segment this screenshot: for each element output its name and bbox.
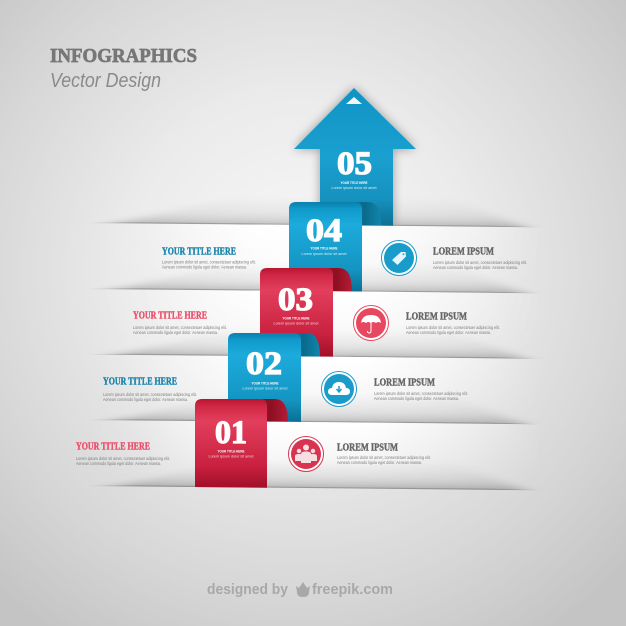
right text row 2: Aenean commodo ligula eget dolor. Aenean massa. [374, 396, 459, 401]
ribbon 02: Lorem ipsum dolor sit amet [242, 386, 288, 390]
shadow at top edge of row 4 [92, 206, 538, 228]
fold of ribbon 03 [316, 268, 352, 292]
right text row 2: Lorem ipsum dolor sit amet, consectetuer adipiscing elit. [374, 391, 468, 396]
ribbon 04 [289, 202, 362, 292]
right text row 3: LOREM IPSUM [406, 312, 467, 322]
left text row 3: Aenean commodo ligula eget dolor. Aenean massa. [133, 330, 218, 335]
right text row 4: Lorem ipsum dolor sit amet, consectetuer adipiscing elit. [433, 260, 527, 265]
left text row 3: Lorem ipsum dolor sit amet, consectetuer adipiscing elit. [133, 325, 227, 330]
panel: row 3 strip [92, 290, 536, 359]
ribbon 01 [195, 399, 267, 488]
arrow 05 [294, 88, 416, 226]
footer credit: freepik.com [312, 582, 393, 598]
right text row 4: Aenean commodo ligula eget dolor. Aenean massa. [433, 265, 518, 270]
fold of ribbon 04 [345, 202, 381, 226]
right text row 3: Lorem ipsum dolor sit amet, consectetuer adipiscing elit. [406, 325, 500, 330]
left text row 2: Aenean commodo ligula eget dolor. Aenean massa. [103, 397, 188, 402]
heading: INFOGRAPHICS [50, 45, 197, 67]
left text row 1 [76, 442, 170, 466]
left text row 2: Lorem ipsum dolor sit amet, consectetuer adipiscing elit. [103, 392, 197, 397]
left text row 3: YOUR TITLE HERE [133, 310, 207, 322]
ribbon 03: 03 [278, 282, 313, 318]
icon: umbrella [354, 306, 388, 340]
left text row 4: Aenean commodo ligula eget dolor. Aenean massa. [162, 264, 247, 270]
ribbon 04: Lorem ipsum dolor sit amet [302, 252, 347, 256]
ribbon 01: YOUR TITLE HERE [218, 450, 245, 454]
arrow 05: YOUR TITLE HERE [340, 181, 368, 185]
footer credit [207, 582, 393, 598]
panel: row 4 strip [92, 224, 536, 294]
ribbon 01: Lorem ipsum dolor sit amet [208, 454, 254, 458]
arrow 05: 05 [337, 146, 372, 182]
icon: tag [382, 240, 416, 276]
heading [50, 45, 197, 92]
left text row 4: Lorem ipsum dolor sit amet, consectetuer adipiscing elit. [162, 260, 256, 264]
icon: cloud download [322, 372, 356, 406]
ribbon 04: 04 [306, 213, 342, 249]
right text row 1 [337, 442, 431, 465]
left text row 2: YOUR TITLE HERE [103, 376, 177, 388]
right text row 1: Aenean commodo ligula eget dolor. Aenean massa. [337, 460, 422, 465]
heading: Vector Design [50, 70, 161, 92]
fold of ribbon 02 [284, 333, 320, 357]
ribbon 03 [260, 268, 333, 357]
ribbon 03: Lorem ipsum dolor sit amet [274, 322, 319, 326]
left text row 4: YOUR TITLE HERE [162, 246, 236, 258]
left text row 1: Aenean commodo ligula eget dolor. Aenean massa. [76, 461, 161, 466]
right text row 3 [406, 312, 500, 335]
left text row 1: Lorem ipsum dolor sit amet, consectetuer adipiscing elit. [76, 456, 170, 461]
left text row 4 [162, 246, 256, 270]
footer credit: designed by [207, 582, 288, 598]
right text row 3: Aenean commodo ligula eget dolor. Aenean massa. [406, 330, 491, 335]
ribbon 02: YOUR TITLE HERE [252, 382, 279, 386]
ribbon 04: YOUR TITLE HERE [310, 246, 338, 250]
right text row 1: LOREM IPSUM [337, 442, 398, 454]
ribbon 01: 01 [215, 415, 247, 451]
left text row 2 [103, 376, 197, 402]
panel: row 2 strip [93, 355, 536, 424]
ribbon 03: YOUR TITLE HERE [282, 316, 310, 320]
ribbon 02: 02 [246, 346, 282, 382]
right text row 4: LOREM IPSUM [433, 246, 494, 258]
right text row 2 [374, 378, 468, 401]
ribbon 02 [228, 333, 301, 422]
panel: row 1 strip [93, 420, 536, 490]
arrow 05: Lorem ipsum dolor sit amet [332, 186, 377, 190]
right text row 2: LOREM IPSUM [374, 378, 435, 388]
left text row 3 [133, 310, 227, 335]
right text row 1: Lorem ipsum dolor sit amet, consectetuer adipiscing elit. [337, 455, 431, 460]
icon: people [288, 436, 324, 472]
fold of ribbon 01 [250, 399, 288, 422]
right text row 4 [433, 246, 527, 270]
left text row 1: YOUR TITLE HERE [76, 442, 150, 452]
